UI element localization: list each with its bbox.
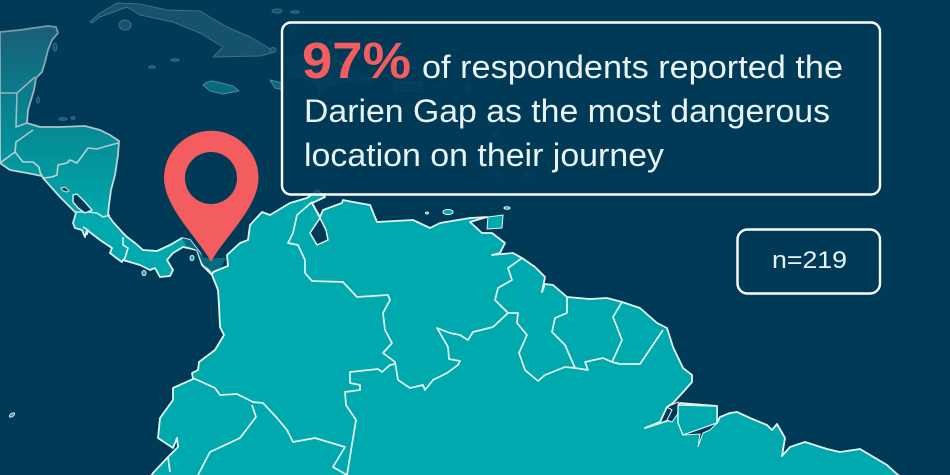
Lake Nicaragua xyxy=(73,194,92,213)
Central America landmass xyxy=(0,26,226,277)
small islands xyxy=(9,207,510,418)
sample size box xyxy=(738,230,880,294)
sample size label: n=219 xyxy=(772,247,847,274)
callout text: of respondents reported the xyxy=(422,49,843,85)
Central America borders xyxy=(0,77,128,260)
Darien shadow xyxy=(182,238,226,272)
national borders xyxy=(168,202,663,475)
callout text: location on their journey xyxy=(304,137,664,173)
statistic: 97%: 97% xyxy=(302,32,411,89)
Amazon delta xyxy=(667,402,717,447)
Lake Maracaibo xyxy=(310,218,328,245)
callout text: Darien Gap as the most dangerous xyxy=(304,93,830,129)
callout text xyxy=(304,49,843,173)
Lake Managua xyxy=(61,187,69,192)
Caribbean islands xyxy=(36,3,529,178)
callout box xyxy=(282,22,880,194)
South America landmass xyxy=(150,190,905,475)
icon: location pin xyxy=(164,131,258,262)
